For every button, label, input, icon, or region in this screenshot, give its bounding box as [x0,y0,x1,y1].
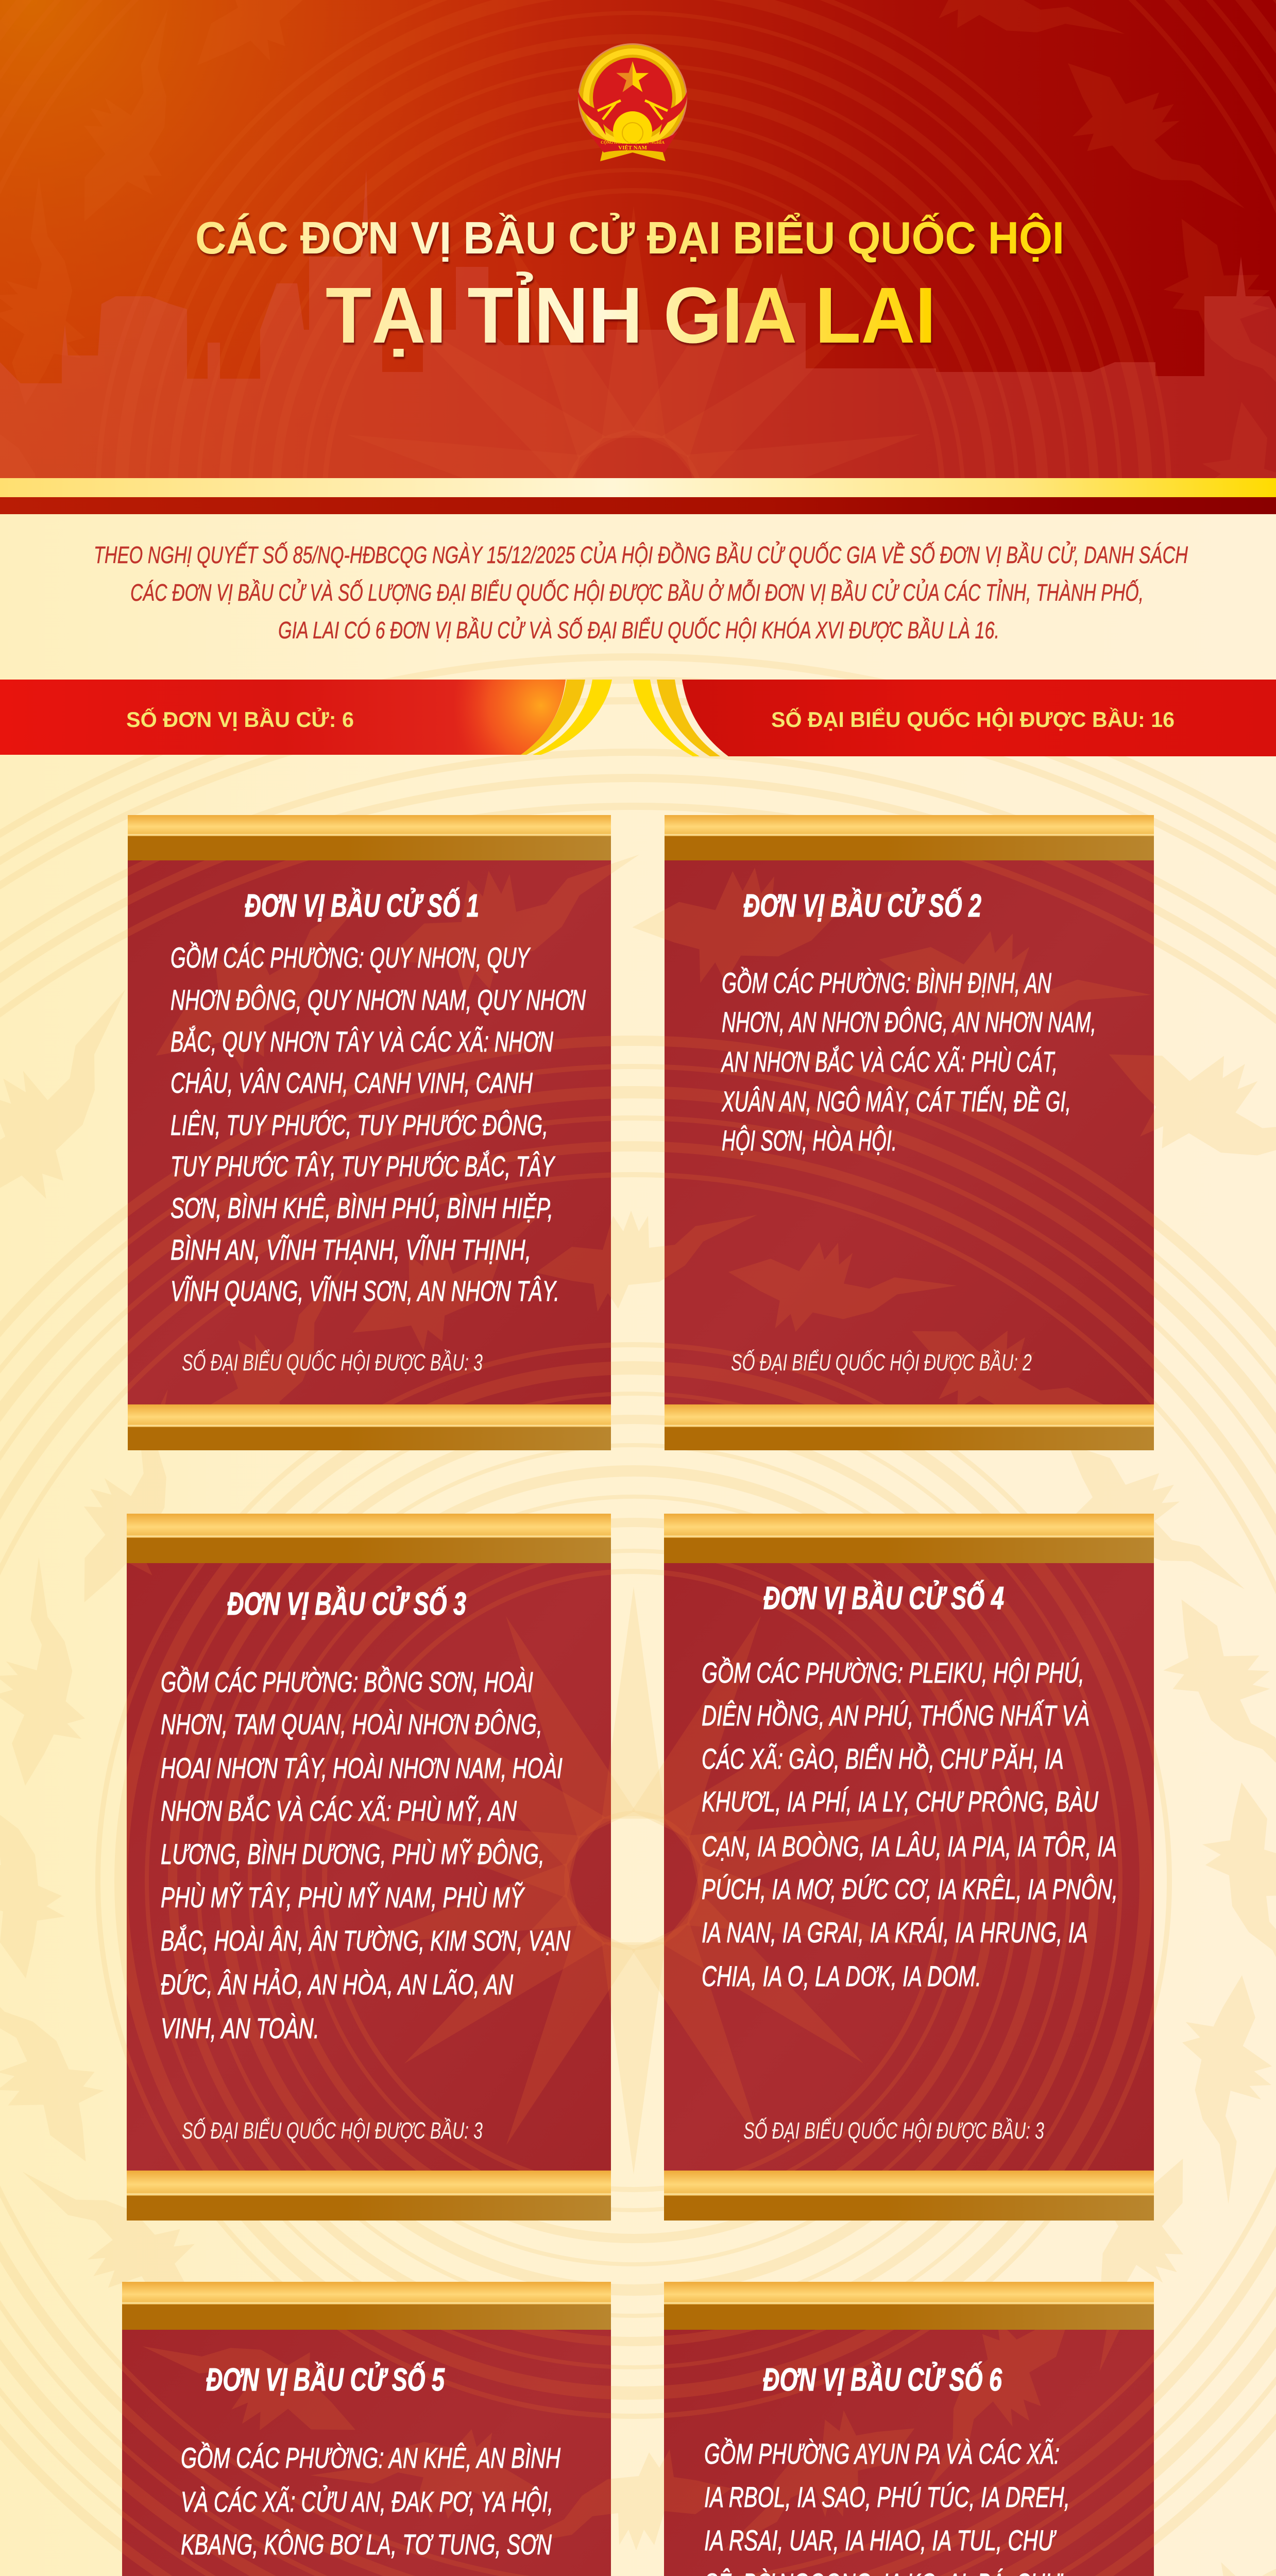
ward list: GỒM PHƯỜNG AYUN PA VÀ CÁC XÃ: [704,2437,1060,2470]
banner: number of constituencies: SỐ ĐƠN VỊ BẦU CỬ: 6 [126,707,354,732]
heading: ĐƠN VỊ BẦU CỬ SỐ 4 [763,1581,1004,1616]
panel: constituency 1 [171,888,586,1376]
ward list: XUÂN AN, NGÔ MÂY, CÁT TIẾN, ĐỀ GI, [721,1085,1071,1117]
national emblem: CỘNG HÒA XÃ HỘI CHỦ NGHĨA [601,140,665,145]
ward list: VINH, AN TOÀN. [161,2012,319,2044]
ward list: GỒM CÁC PHƯỜNG: QUY NHƠN, QUY [171,941,531,974]
red strip [0,497,1276,514]
ward list [704,2437,1083,2576]
ward list [161,1666,570,2044]
ward list: LIÊN, TUY PHƯỚC, TUY PHƯỚC ĐÔNG, [171,1109,548,1141]
ward list: GỒM CÁC PHƯỜNG: PLEIKU, HỘI PHÚ, [702,1656,1084,1689]
hero header background [0,0,1276,1723]
card backgrounds: red panels and gold bands [0,657,1276,2576]
ward list: NHƠN, TAM QUAN, HOÀI NHƠN ĐÔNG, [161,1708,542,1740]
emblem star [617,61,649,92]
ward list: AN NHƠN BẮC VÀ CÁC XÃ: PHÙ CÁT, [721,1045,1058,1078]
heading: ĐƠN VỊ BẦU CỬ SỐ 1 [245,888,479,924]
intro text [94,541,1188,643]
ward list: IA RBOL, IA SAO, PHÚ TÚC, IA DREH, [704,2481,1070,2513]
deputies count: SỐ ĐẠI BIỂU QUỐC HỘI ĐƯỢC BẦU: 3 [743,2117,1044,2144]
ward list: NHƠN ĐÔNG, QUY NHƠN NAM, QUY NHƠN [171,984,586,1016]
banner: number of deputies [633,680,1276,756]
heading: ĐƠN VỊ BẦU CỬ SỐ 2 [743,888,981,924]
heading: ĐƠN VỊ BẦU CỬ SỐ 6 [763,2362,1002,2398]
ward list: ĐỨC, ÂN HẢO, AN HÒA, AN LÃO, AN [161,1968,513,2001]
banner: number of deputies: SỐ ĐẠI BIỂU QUỐC HỘI ĐƯỢC BẦU: 16 [771,707,1175,732]
ward list: VĨNH QUANG, VĨNH SƠN, AN NHƠN TÂY. [171,1275,559,1307]
ward list [702,1656,1118,1992]
ward list: KBANG, KÔNG BƠ LA, TƠ TUNG, SƠN [181,2528,552,2561]
ward list: GỒM CÁC PHƯỜNG: AN KHÊ, AN BÌNH [181,2442,560,2474]
deputies count: SỐ ĐẠI BIỂU QUỐC HỘI ĐƯỢC BẦU: 3 [182,1349,483,1376]
panel: constituency 4 [702,1581,1118,2144]
ward list: BẮC, QUY NHƠN TÂY VÀ CÁC XÃ: NHƠN [171,1025,553,1058]
title [195,212,1064,360]
title: TẠI TỈNH GIA LAI [326,271,936,360]
banner: number of constituencies [0,680,612,755]
ward list: IA NAN, IA GRAI, IA KRÁI, IA HRUNG, IA [702,1916,1088,1948]
national emblem [578,43,687,161]
ward list: CHIA, IA O, LA DƠK, IA DOM. [702,1960,981,1992]
ward list: GỒM CÁC PHƯỜNG: BỒNG SƠN, HOÀI [161,1666,533,1698]
emblem gear [613,111,652,150]
ward list: DIÊN HỒNG, AN PHÚ, THỐNG NHẤT VÀ [702,1699,1090,1732]
panel: constituency 2 [721,888,1096,1376]
ward list: TUY PHƯỚC TÂY, TUY PHƯỚC BẮC, TÂY [171,1150,555,1182]
ward list: KHƯƠL, IA PHÍ, IA LY, CHƯ PRÔNG, BÀU [702,1785,1098,1818]
ward list: HOAI NHƠN TÂY, HOÀI NHƠN NAM, HOÀI [161,1752,563,1784]
panel: constituency 3 [161,1586,570,2144]
title: CÁC ĐƠN VỊ BẦU CỬ ĐẠI BIỂU QUỐC HỘI [195,212,1064,263]
gold strip [0,478,1276,497]
city skyline silhouette [0,170,1276,478]
ward list: IA RSAI, UAR, IA HIAO, IA TUL, CHƯ [704,2524,1057,2556]
ward list [721,967,1096,1157]
panel: constituency 6 [704,2362,1083,2576]
heading: ĐƠN VỊ BẦU CỬ SỐ 3 [227,1586,466,1622]
ward list [181,2442,560,2576]
ward list [171,941,586,1307]
heading: ĐƠN VỊ BẦU CỬ SỐ 5 [206,2362,445,2398]
ward list: VÀ CÁC XÃ: CỬU AN, ĐAK PƠ, YA HỘI, [181,2485,553,2518]
deputies count: SỐ ĐẠI BIỂU QUỐC HỘI ĐƯỢC BẦU: 3 [182,2117,483,2144]
intro text: GIA LAI CÓ 6 ĐƠN VỊ BẦU CỬ VÀ SỐ ĐẠI BIỂU QUỐC HỘI KHÓA XVI ĐƯỢC BẦU LÀ 16. [278,616,999,643]
ward list: NHƠN, AN NHƠN ĐÔNG, AN NHƠN NAM, [722,1006,1096,1038]
ward list: PHÙ MỸ TÂY, PHÙ MỸ NAM, PHÙ MỸ [161,1881,525,1913]
panel: constituency 5 [181,2362,560,2576]
ward list: BÌNH AN, VĨNH THẠNH, VĨNH THỊNH, [171,1233,531,1266]
emblem base and ribbon [600,146,666,161]
ward list: GỒM CÁC PHƯỜNG: BÌNH ĐỊNH, AN [722,967,1051,999]
ward list: CÁC XÃ: GÀO, BIỂN HỒ, CHƯ PĂH, IA [702,1742,1064,1775]
ward list: SƠN, BÌNH KHÊ, BÌNH PHÚ, BÌNH HIỆP, [171,1192,553,1224]
ward list: CHÂU, VÂN CANH, CANH VINH, CANH [171,1066,533,1099]
ward list: CẠN, IA BOÒNG, IA LÂU, IA PIA, IA TÔR, IA [702,1830,1117,1862]
ward list: PÚCH, IA MƠ, ĐỨC CƠ, IA KRÊL, IA PNÔN, [702,1873,1118,1905]
deputies count: SỐ ĐẠI BIỂU QUỐC HỘI ĐƯỢC BẦU: 2 [731,1349,1032,1376]
national emblem: VIỆT NAM [618,144,647,151]
ward list: BẮC, HOÀI ÂN, ÂN TƯỜNG, KIM SƠN, VẠN [161,1924,570,1957]
ward list: NHƠN BẮC VÀ CÁC XÃ: PHÙ MỸ, AN [161,1794,517,1827]
ward list: HỘI SƠN, HÒA HỘI. [722,1124,897,1157]
ward list: LƯƠNG, BÌNH DƯƠNG, PHÙ MỸ ĐÔNG, [161,1838,545,1870]
